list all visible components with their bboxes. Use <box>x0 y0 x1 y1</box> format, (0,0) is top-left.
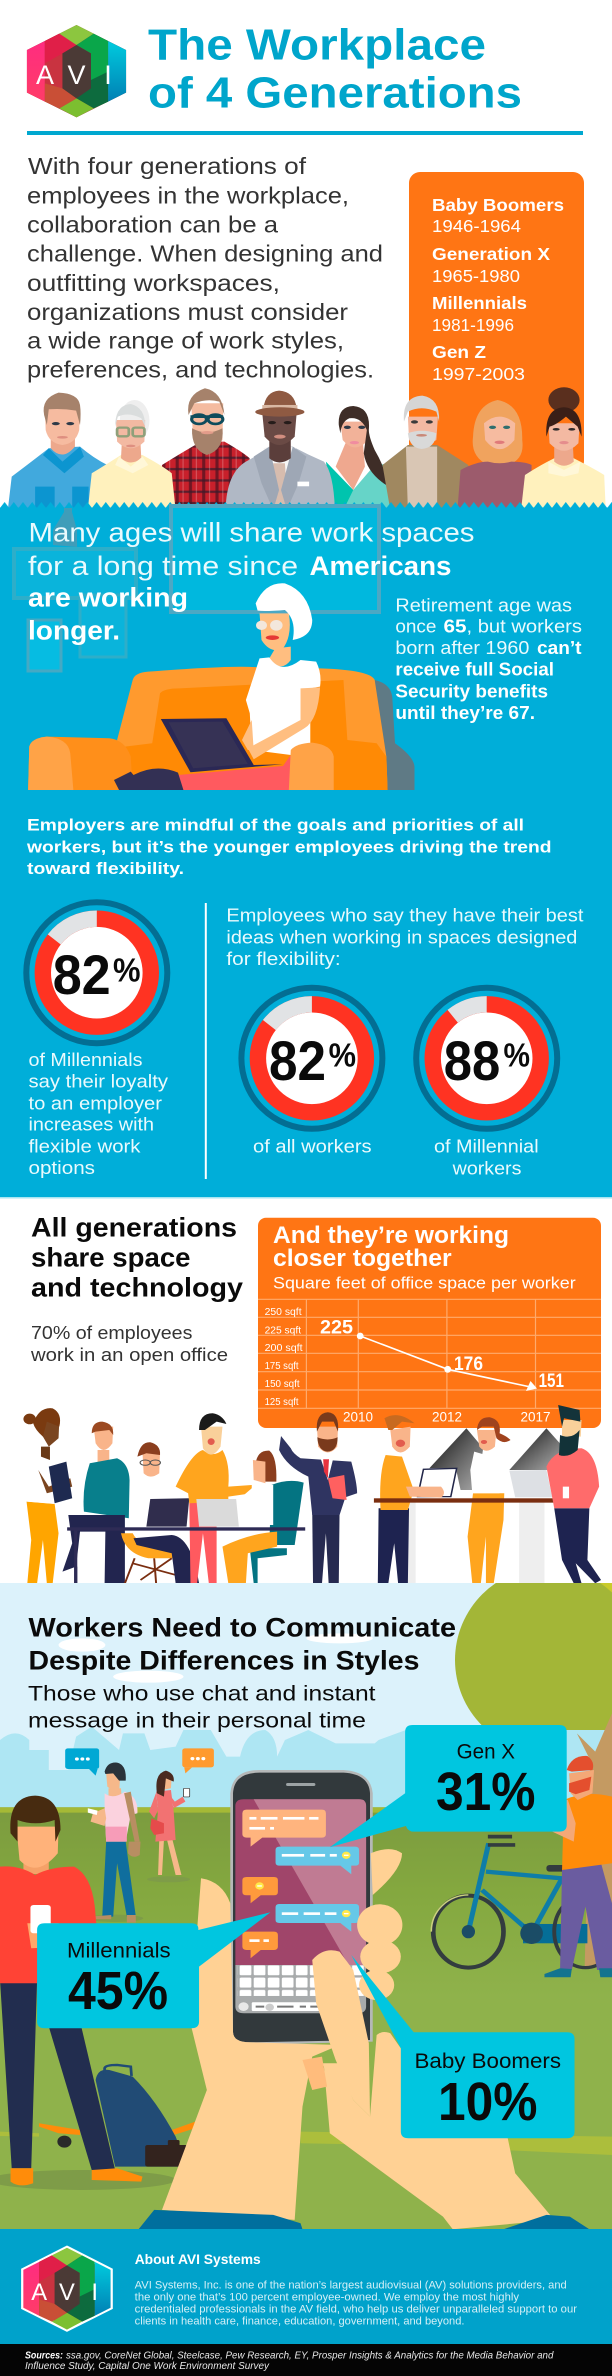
background: park grass <box>0 1807 612 2229</box>
text: employers: toward flexibility. <box>27 859 184 878</box>
intro text: employees in the workplace, <box>27 182 349 208</box>
chart: 82% of all workers donut <box>241 988 382 1129</box>
person: man with hat and grey suit <box>226 391 335 510</box>
laptop: silver and table top <box>67 1499 305 1583</box>
logo: small AVI hexagon: I <box>91 2279 98 2306</box>
subheading: chat users: message in their personal time <box>28 1710 366 1733</box>
intro text: With four generations of <box>28 153 307 179</box>
person: man with shoulder bag and phone <box>87 1763 143 1923</box>
intro text: a wide range of work styles, <box>27 327 344 353</box>
chart: 82% of Millennials donut: % <box>113 952 140 989</box>
data labels: 151 <box>539 1371 564 1392</box>
axis labels: years: 2012 <box>432 1410 462 1425</box>
text: retirement age: receive full Social <box>395 659 554 680</box>
person: man in teal sweater <box>62 1422 130 1583</box>
data labels: 225 <box>320 1317 353 1338</box>
panel: communication section scene <box>0 1552 612 2229</box>
callout: Gen X 31% <box>437 1744 534 1810</box>
callout: Millennials 45%: Millennials <box>67 1940 171 1963</box>
title: of 4 Generations <box>148 68 522 118</box>
logo: AVI hexagon: I <box>104 60 112 90</box>
illustration: woman on sofa with laptop <box>28 583 414 790</box>
heading: about AVI systems: About AVI Systems <box>135 2251 261 2267</box>
heading: many ages: are working <box>28 583 188 613</box>
desk top <box>374 1498 571 1503</box>
heading: many ages <box>28 518 474 646</box>
text: donut captions: of Millennial <box>434 1137 539 1157</box>
panel: sources bar: Influence Study, Capital One Work Environment Survey <box>25 2361 270 2372</box>
heading: workers need to communicate <box>28 1613 456 1675</box>
text: 70% open office: work in an open office <box>30 1344 228 1365</box>
background decor: faint office window and pictures <box>14 506 379 671</box>
person: woman in coral dress <box>147 1771 190 1882</box>
panel: sources bar: ssa.gov, CoreNet Global, Steelcase, Pew Research, EY, Prosper Insights & Analytics for the Media Behavior and <box>66 2350 554 2361</box>
person: older man with tan jacket <box>382 396 468 510</box>
text: retirement age: until they’re 67. <box>395 702 535 723</box>
panel: generations key: Gen Z <box>432 342 486 362</box>
panel: generations key: 1946-1964 <box>432 216 521 236</box>
hands holding phone <box>162 1849 554 2229</box>
heading: many ages: for a long time since <box>28 551 298 581</box>
callout: Gen X 31%: Gen X <box>457 1740 515 1763</box>
chat bubbles on phone <box>242 1810 359 1958</box>
panel: generations key: Generation X <box>432 244 550 264</box>
illustration: office team at tables <box>23 1405 601 1583</box>
background: city skyline <box>0 1727 612 1808</box>
title <box>148 20 522 118</box>
text: of Millennials say: options <box>28 1158 95 1178</box>
intro text: outfitting workspaces, <box>27 270 280 296</box>
logo: small AVI hexagon: V <box>59 2279 75 2306</box>
text: employers: Employers are mindful of the goals and priorities of all <box>27 816 524 835</box>
callout: Millennials 45%: 45% <box>68 1961 168 2021</box>
panel: sources bar: Sources: <box>25 2350 63 2361</box>
text: retirement age: born after 1960 <box>395 637 529 658</box>
heading: all generations <box>31 1213 243 1302</box>
background: clouds <box>59 1633 373 1683</box>
panel: generations key <box>409 172 584 472</box>
text: about body <box>135 2279 577 2327</box>
axis labels: sqft <box>265 1307 303 1408</box>
panel: generations key: 1981-1996 <box>432 315 514 335</box>
text: donut captions: of all workers <box>253 1137 372 1157</box>
speech bubble: blue dots <box>65 1748 99 1776</box>
person: bearded man in pink sweater <box>546 1405 601 1583</box>
person: woman with clipboard <box>23 1408 72 1583</box>
logo: small AVI hexagon <box>23 2248 111 2330</box>
axis labels: sqft: 125 sqft <box>265 1397 299 1408</box>
heading: all generations: share space <box>31 1243 190 1273</box>
axis labels: sqft: 150 sqft <box>265 1379 300 1390</box>
person: older woman with yellow blouse <box>88 400 176 510</box>
heading: closer together: closer together <box>273 1245 452 1272</box>
person: man in red shirt foreground <box>0 1796 195 2190</box>
data labels <box>320 1317 564 1392</box>
panel: generations key: Millennials <box>432 293 527 313</box>
background: tree canopy <box>455 1583 612 1730</box>
illustration: eight workers of different generations <box>8 387 606 510</box>
chart: 88% of Millennial workers donut <box>416 988 557 1129</box>
intro text: collaboration can be a <box>27 211 278 237</box>
text: of Millennials say: say their loyalty <box>28 1072 168 1092</box>
text: 70% open office: 70% of employees <box>31 1322 192 1343</box>
person: man in blue shirt <box>8 393 107 510</box>
phone screen <box>235 1799 366 1965</box>
person: woman with teal top <box>326 406 396 510</box>
person: standing man in yellow sweater <box>176 1413 252 1583</box>
text: 70% open office <box>30 1322 228 1365</box>
person: woman with blonde hair <box>457 400 532 510</box>
panel: generations key: 1965-1980 <box>432 266 520 286</box>
text: retirement age: Security benefits <box>395 680 548 701</box>
callout: Baby Boomers 10%: 10% <box>438 2072 538 2132</box>
logo: small AVI hexagon: A <box>31 2279 47 2306</box>
chart: 82% of all workers donut: 82 <box>269 1029 326 1092</box>
text: of Millennials say <box>28 1050 168 1178</box>
axis labels: years <box>343 1410 551 1425</box>
panel: square feet line chart: Square feet of office space per worker <box>273 1274 576 1293</box>
axis labels: years: 2010 <box>343 1410 373 1425</box>
person: woman in white tee <box>468 1417 511 1583</box>
text: about body: the only one that’s 100 percent employee-owned. We employ the most highly <box>135 2291 520 2303</box>
text: employers: workers, but it’s the younger employees driving the trend <box>26 837 552 856</box>
person: seated man with glasses <box>133 1442 199 1583</box>
text: retirement age: once <box>395 616 436 637</box>
text: retirement age: 65 <box>444 616 466 637</box>
heading: closer together: And they’re working <box>273 1222 509 1249</box>
person: man in yellow at desk <box>378 1415 444 1583</box>
panel: generations key: 1997-2003 <box>432 364 525 384</box>
speech bubble: orange dots <box>182 1748 214 1773</box>
table and chair with orange seat <box>121 1533 176 1583</box>
heading: all generations: All generations <box>31 1213 237 1243</box>
intro text: organizations must consider <box>27 299 348 325</box>
intro text: preferences, and technologies. <box>27 356 374 382</box>
heading: many ages: Americans <box>310 551 452 581</box>
text: of Millennials say: increases with <box>28 1115 154 1135</box>
shirt sleeves <box>139 2210 589 2229</box>
text: of Millennials say: of Millennials <box>28 1050 142 1070</box>
axis labels: years: 2017 <box>520 1410 551 1425</box>
callout: Millennials 45% <box>68 1942 170 2010</box>
heading: closer together <box>273 1222 509 1272</box>
text: employees who say: ideas when working in spaces designed <box>226 926 577 947</box>
subheading: chat users <box>28 1683 376 1733</box>
icon: bicycle <box>431 1837 612 1968</box>
text: retirement age: can’t <box>537 637 582 658</box>
text: employees who say: for flexibility: <box>226 948 341 969</box>
person: young woman with hair bun <box>521 387 606 510</box>
chart: 82% of Millennials donut <box>26 902 167 1043</box>
heading: all generations: and technology <box>31 1272 243 1302</box>
intro text <box>27 153 383 382</box>
subheading: chat users: Those who use chat and instant <box>28 1683 376 1706</box>
text: about body: clients in health care, finance, education, government, and beyond. <box>135 2315 464 2327</box>
panel: blue working longer section <box>0 502 612 1198</box>
text: donut captions <box>253 1137 539 1178</box>
panel: square feet line chart <box>258 1218 601 1428</box>
title: The Workplace <box>148 20 486 70</box>
data line with arrow <box>357 1333 537 1391</box>
backpack and skateboard <box>39 2065 195 2167</box>
callout: Baby Boomers 10% <box>416 2052 560 2120</box>
text: retirement age: , but workers <box>466 616 582 637</box>
person: bearded man with plaid shirt <box>160 388 250 510</box>
logo: AVI hexagon: V <box>67 60 86 90</box>
chart: 88% of Millennial workers donut: % <box>504 1037 530 1074</box>
person: seated woman in white blouse <box>222 1451 304 1583</box>
text: donut captions: workers <box>452 1158 521 1178</box>
text: employees who say <box>226 905 583 969</box>
callout: Baby Boomers 10%: Baby Boomers <box>414 2050 561 2073</box>
heading: workers need to communicate: Workers Need to Communicate <box>28 1613 456 1643</box>
logo: AVI hexagon <box>27 25 126 117</box>
callout: Gen X 31%: 31% <box>436 1762 536 1822</box>
axis labels: sqft: 225 sqft <box>265 1325 301 1336</box>
text: of Millennials say: flexible work <box>28 1136 142 1156</box>
person: man in navy suit <box>279 1412 357 1583</box>
text: retirement age: Retirement age was <box>395 595 572 616</box>
text: of Millennials say: to an employer <box>28 1093 162 1113</box>
chart: 82% of Millennials donut: 82 <box>53 943 111 1006</box>
axis labels: sqft: 250 sqft <box>265 1307 302 1318</box>
phone keyboard <box>235 1965 366 2013</box>
axis labels: sqft: 200 sqft <box>265 1343 303 1354</box>
text: employers <box>26 816 552 878</box>
heading: many ages: longer. <box>28 616 120 646</box>
axis labels: sqft: 175 sqft <box>265 1361 299 1372</box>
text: retirement age <box>395 595 582 723</box>
phone <box>230 1770 373 2045</box>
chart: 88% of Millennial workers donut: 88 <box>444 1029 500 1092</box>
chart: 82% of all workers donut: % <box>329 1037 356 1074</box>
text: employees who say: Employees who say they have their best <box>226 905 583 926</box>
person: man with bicycle <box>431 1756 612 1977</box>
logo: AVI hexagon: A <box>36 60 54 90</box>
text: about body: AVI Systems, Inc. is one of the nation’s largest audiovisual (AV) solutions providers, and <box>135 2279 567 2291</box>
data labels: 176 <box>454 1354 483 1375</box>
desk with shadows and laptops <box>402 1428 563 1583</box>
callout bubble shapes <box>37 1725 575 2138</box>
heading: many ages: Many ages will share work spaces <box>28 518 474 548</box>
text: about body: credentialed professionals in the AV field, who help us deliver unparalleled support to our <box>135 2303 577 2315</box>
panel: about AVI footer <box>0 2229 612 2344</box>
heading: workers need to communicate: Despite Differences in Styles <box>28 1645 420 1675</box>
panel: generations key: Baby Boomers <box>432 195 564 215</box>
tree trunk <box>577 1713 612 1967</box>
intro text: challenge. When designing and <box>27 241 383 267</box>
panel: sources bar <box>0 2344 612 2376</box>
